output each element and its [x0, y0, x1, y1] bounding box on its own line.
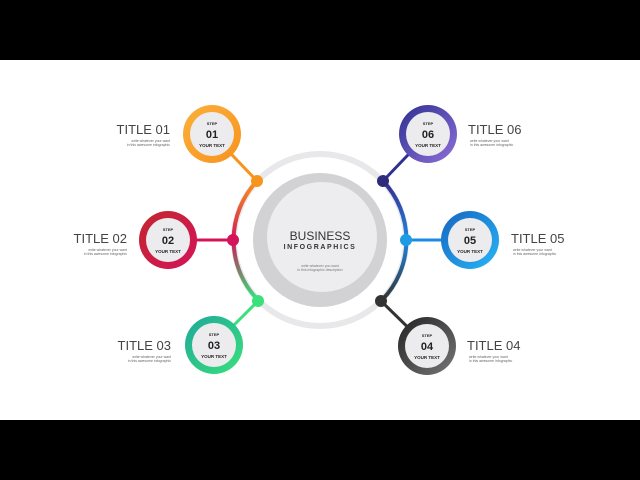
descriptions: write whatever your want — [88, 248, 127, 252]
descriptions: in this awesome infographic — [469, 359, 512, 363]
descriptions: write whatever your want — [470, 139, 509, 143]
descriptions: write whatever your want — [131, 139, 170, 143]
step circles: 05 — [464, 235, 476, 247]
step circles: 06 — [422, 129, 434, 141]
step circles — [139, 105, 499, 375]
step circles: STEP — [207, 121, 218, 126]
step circles: YOUR TEXT — [415, 143, 441, 148]
titles — [74, 122, 564, 353]
descriptions: in this awesome infographic — [513, 252, 556, 256]
step circles: 01 — [206, 129, 218, 141]
titles: TITLE 06 — [468, 122, 521, 137]
step circles: YOUR TEXT — [414, 355, 440, 360]
center disc — [253, 173, 387, 307]
titles: TITLE 03 — [118, 338, 171, 353]
center disc: in this infographic description — [297, 268, 343, 272]
center disc: INFOGRAPHICS — [284, 244, 356, 251]
step circles: YOUR TEXT — [201, 354, 227, 359]
step circles: 02 — [162, 235, 174, 247]
right colored arc — [382, 181, 406, 300]
center disc: write whatever you want — [301, 264, 339, 268]
dots — [227, 175, 412, 307]
descriptions — [84, 139, 556, 363]
outer gray ring — [234, 154, 406, 326]
descriptions: in this awesome infographic — [84, 252, 127, 256]
descriptions: write whatever your want — [513, 248, 552, 252]
step circles: STEP — [465, 227, 476, 232]
descriptions: in this awesome infographic — [127, 143, 170, 147]
center disc: BUSINESS — [290, 229, 350, 243]
step circles: 03 — [208, 340, 220, 352]
titles: TITLE 04 — [467, 338, 520, 353]
step circles: YOUR TEXT — [199, 143, 225, 148]
descriptions: in this awesome infographic — [128, 359, 171, 363]
descriptions: in this awesome infographic — [470, 143, 513, 147]
titles: TITLE 01 — [117, 122, 170, 137]
step circles: YOUR TEXT — [457, 249, 483, 254]
descriptions: write whatever your want — [132, 355, 171, 359]
step circles: STEP — [163, 227, 174, 232]
titles: TITLE 02 — [74, 231, 127, 246]
titles: TITLE 05 — [511, 231, 564, 246]
step circles: STEP — [209, 332, 220, 337]
step circles: STEP — [423, 121, 434, 126]
step circles: STEP — [422, 333, 433, 338]
step circles: 04 — [421, 341, 434, 353]
descriptions: write whatever your want — [469, 355, 508, 359]
step circles: YOUR TEXT — [155, 249, 181, 254]
left colored arc — [234, 181, 258, 300]
connectors — [168, 134, 470, 346]
